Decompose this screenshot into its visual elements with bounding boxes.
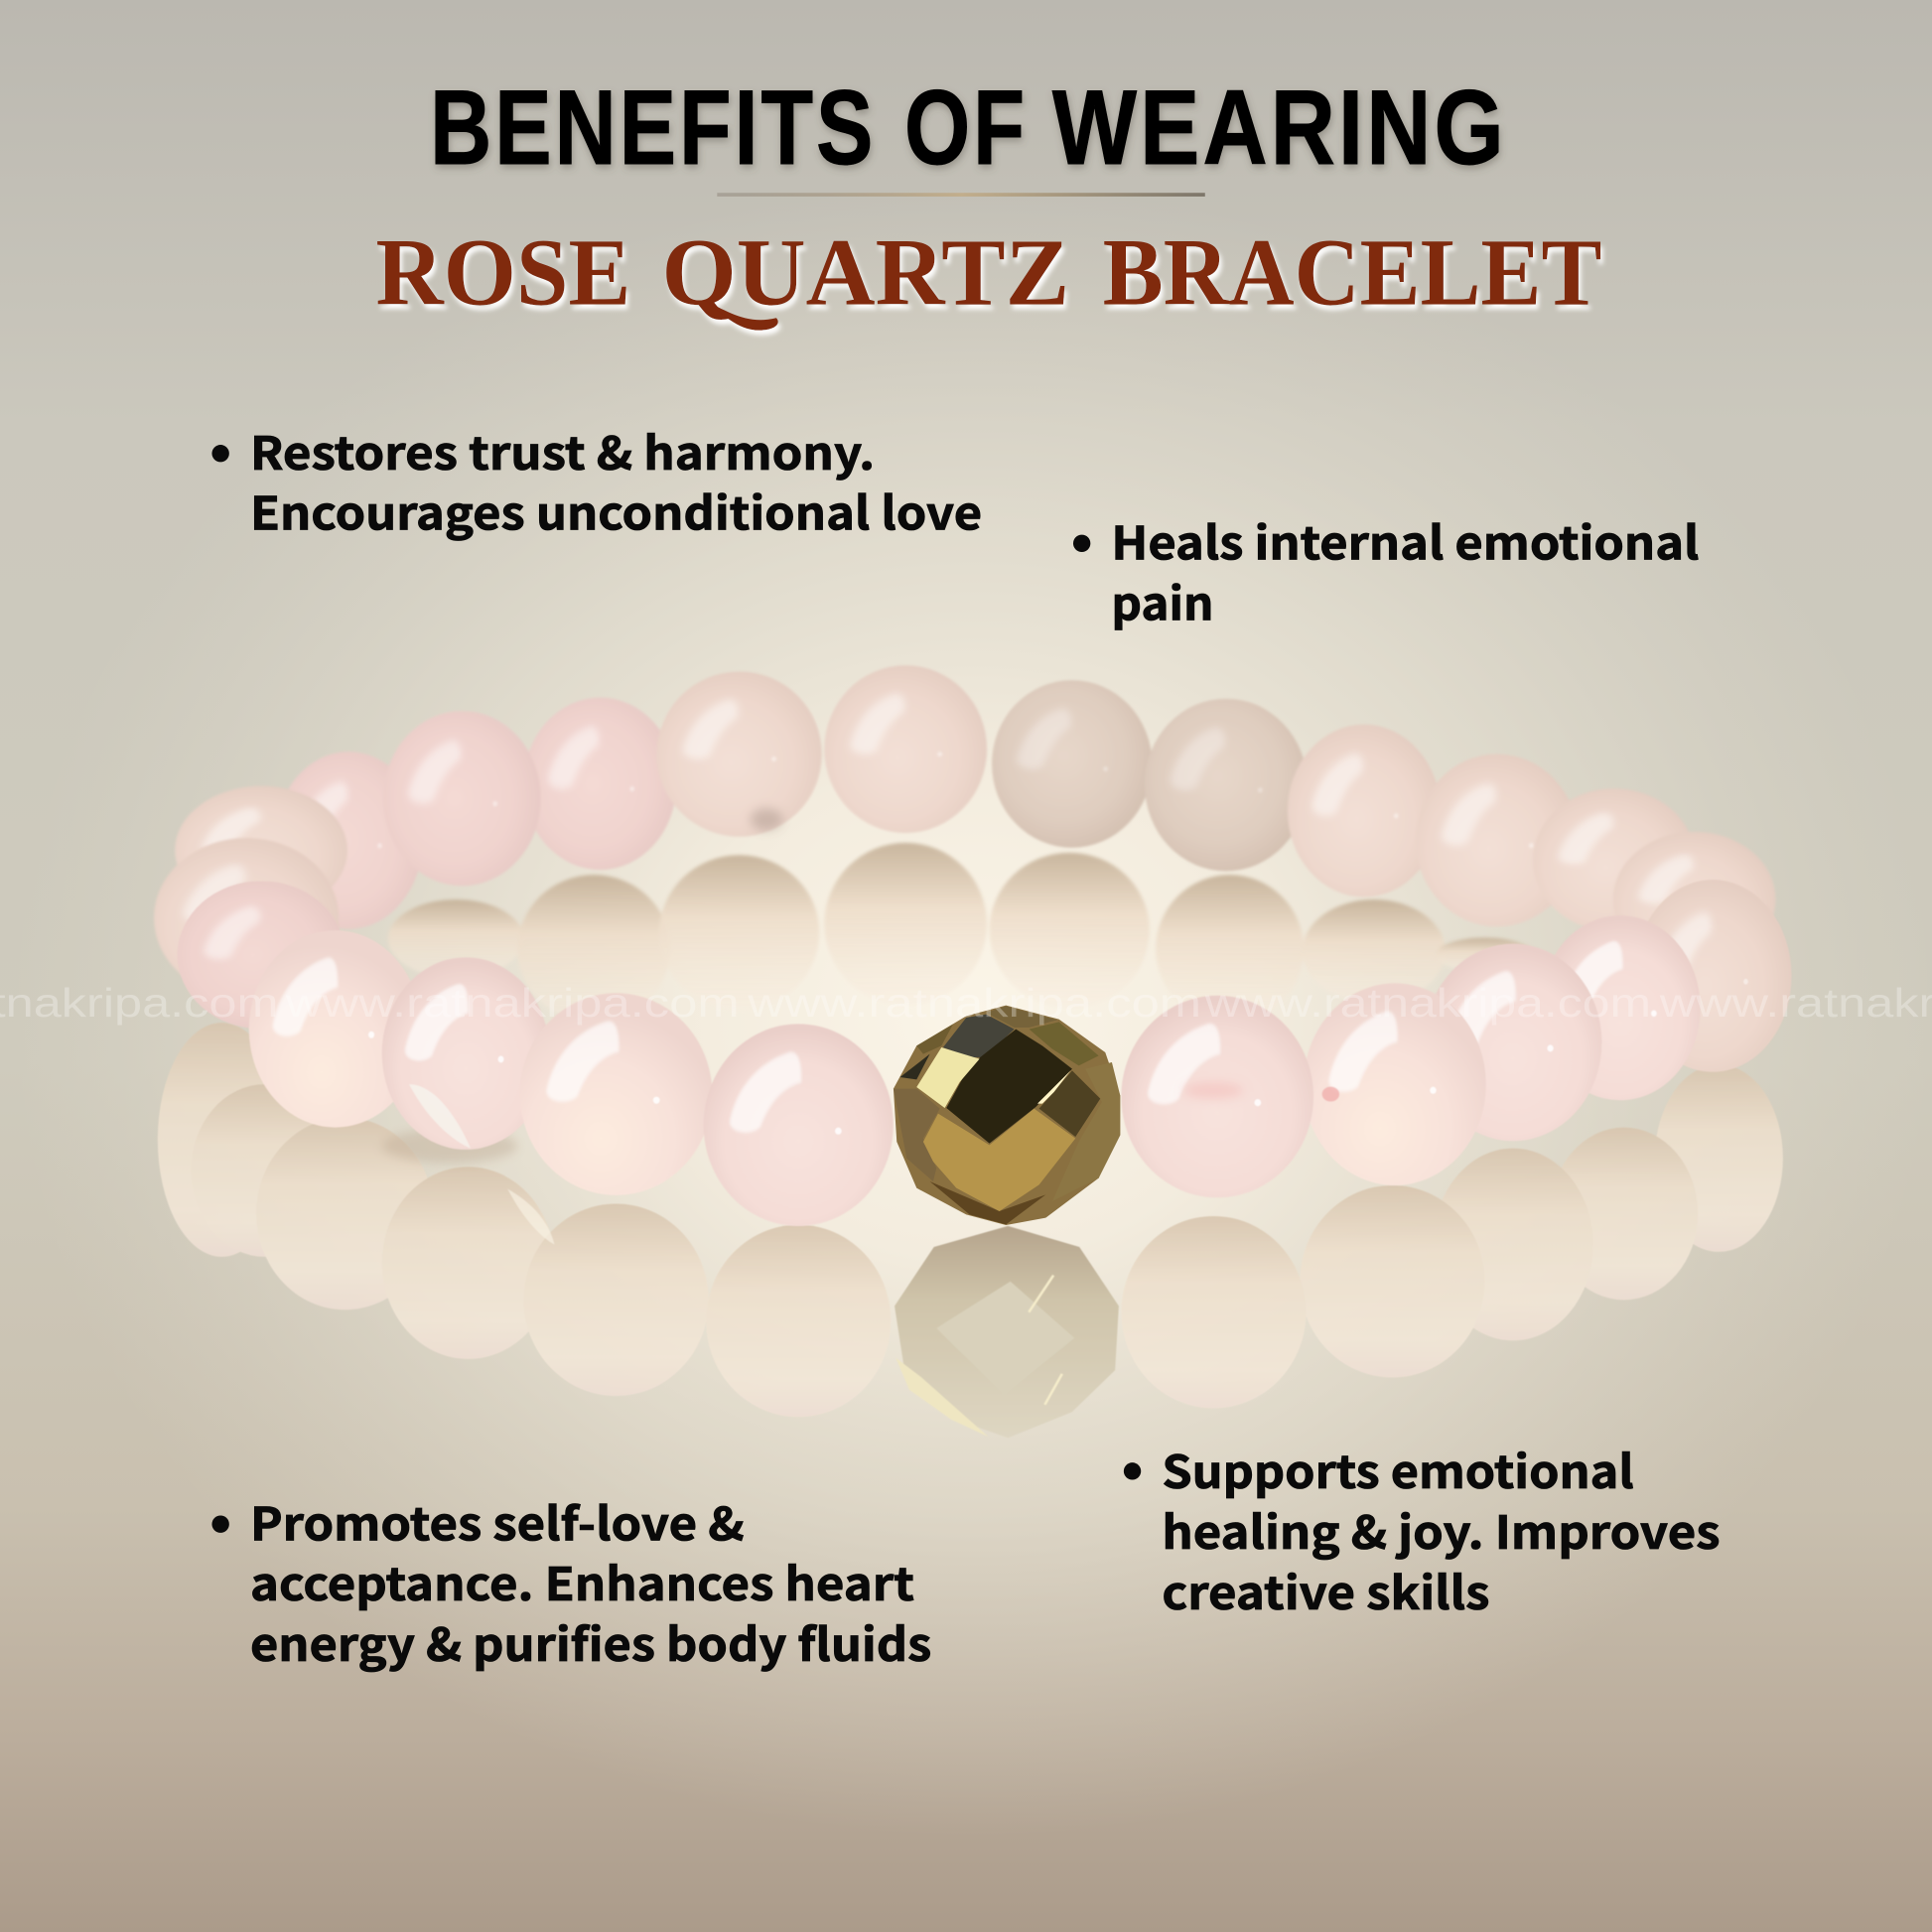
benefit: emotional pain: [1073, 507, 1699, 633]
benefit: trust and love: [211, 418, 982, 544]
title: benefits of wearing: WEARING: [1052, 68, 1507, 187]
benefit: trust and love: Restores trust & harmony.: [250, 418, 875, 483]
subtitle: rose quartz bracelet: ROSE: [376, 219, 630, 326]
bracelet illustration with reflections: [154, 665, 1792, 1438]
title divider line: [717, 193, 1205, 197]
front row of beads: [178, 880, 1792, 1226]
inner reflection of back beads: [388, 843, 1534, 1023]
watermark: www.ratnakripa.com: [747, 980, 1201, 1026]
benefit: emotional pain: Heals internal emotional: [1111, 507, 1699, 573]
back row of beads: [154, 665, 1775, 998]
benefit: emotional healing and creativity: [1124, 1437, 1721, 1623]
title: benefits of wearing: [430, 68, 1507, 187]
benefit: trust and love: Encourages unconditional love: [250, 479, 982, 544]
watermark: www.ratnakripa.com: [285, 980, 740, 1026]
pyrite faceted bead: [894, 1006, 1120, 1225]
benefit: emotional healing and creativity: healing & joy. Improves: [1162, 1497, 1721, 1563]
title: benefits of wearing: BENEFITS: [430, 68, 876, 187]
watermark: www.ratnakripa.com: [1204, 980, 1651, 1026]
benefit: self-love and heart energy: [211, 1488, 931, 1675]
decorative swash under Q: [705, 301, 778, 331]
subtitle: rose quartz bracelet: BRACELET: [1103, 219, 1601, 326]
benefit: emotional healing and creativity: creative skills: [1162, 1558, 1489, 1623]
subtitle: rose quartz bracelet: QUARTZ: [661, 219, 1069, 326]
benefit: self-love and heart energy: energy & purifies body fluids: [250, 1609, 931, 1675]
title: benefits of wearing: OF: [904, 68, 1028, 187]
watermark: [0, 980, 1932, 1026]
benefit: self-love and heart energy: Promotes self-love &: [250, 1488, 745, 1554]
subtitle: rose quartz bracelet: [376, 219, 1601, 331]
benefit: self-love and heart energy: acceptance. Enhances heart: [250, 1549, 914, 1614]
lower reflection of front beads: [158, 1023, 1783, 1417]
pyrite bead reflection: [895, 1226, 1119, 1438]
benefit: emotional healing and creativity: Supports emotional: [1162, 1437, 1634, 1502]
benefit: emotional pain: pain: [1111, 568, 1213, 633]
